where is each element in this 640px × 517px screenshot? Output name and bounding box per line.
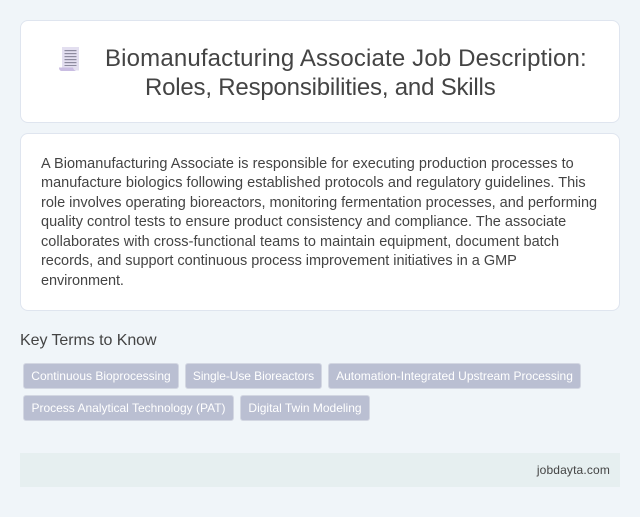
- description text: role involves operating bioreactors, monitoring fermentation processes, and performing: [41, 195, 597, 211]
- title: [105, 45, 587, 101]
- description text: records, and support continuous process improvement initiatives in a GMP: [41, 253, 517, 269]
- footer source: jobdayta.com: [537, 463, 610, 477]
- description text: environment.: [41, 273, 124, 289]
- description text: A Biomanufacturing Associate is responsible for executing production processes to: [41, 156, 574, 172]
- key terms tags: [23, 363, 581, 421]
- tag: [240, 395, 370, 421]
- tag: [328, 363, 581, 389]
- description text: [41, 156, 597, 289]
- tag: Process Analytical Technology (PAT): [31, 401, 226, 415]
- tag: [23, 395, 234, 421]
- description text: quality control tests to ensure product consistency and compliance. The associate: [41, 214, 566, 230]
- description text: collaborates with cross-functional teams to maintain equipment, document batch: [41, 234, 559, 250]
- tag: Continuous Bioprocessing: [31, 369, 171, 383]
- icon: document scroll: [59, 47, 79, 71]
- tag: [185, 363, 322, 389]
- tag: Automation-Integrated Upstream Processing: [336, 369, 573, 383]
- title: Roles, Responsibilities, and Skills: [145, 74, 496, 101]
- description panel: [20, 133, 620, 311]
- footer bar: [20, 453, 620, 487]
- tag: Digital Twin Modeling: [248, 401, 362, 415]
- heading: key terms: Key Terms to Know: [20, 332, 157, 349]
- header panel: [20, 20, 620, 123]
- title: Biomanufacturing Associate Job Description:: [105, 45, 587, 72]
- description text: manufacture biologics following established protocols and regulatory guidelines. This: [41, 175, 586, 191]
- tag: [23, 363, 179, 389]
- tag: Single-Use Bioreactors: [193, 369, 314, 383]
